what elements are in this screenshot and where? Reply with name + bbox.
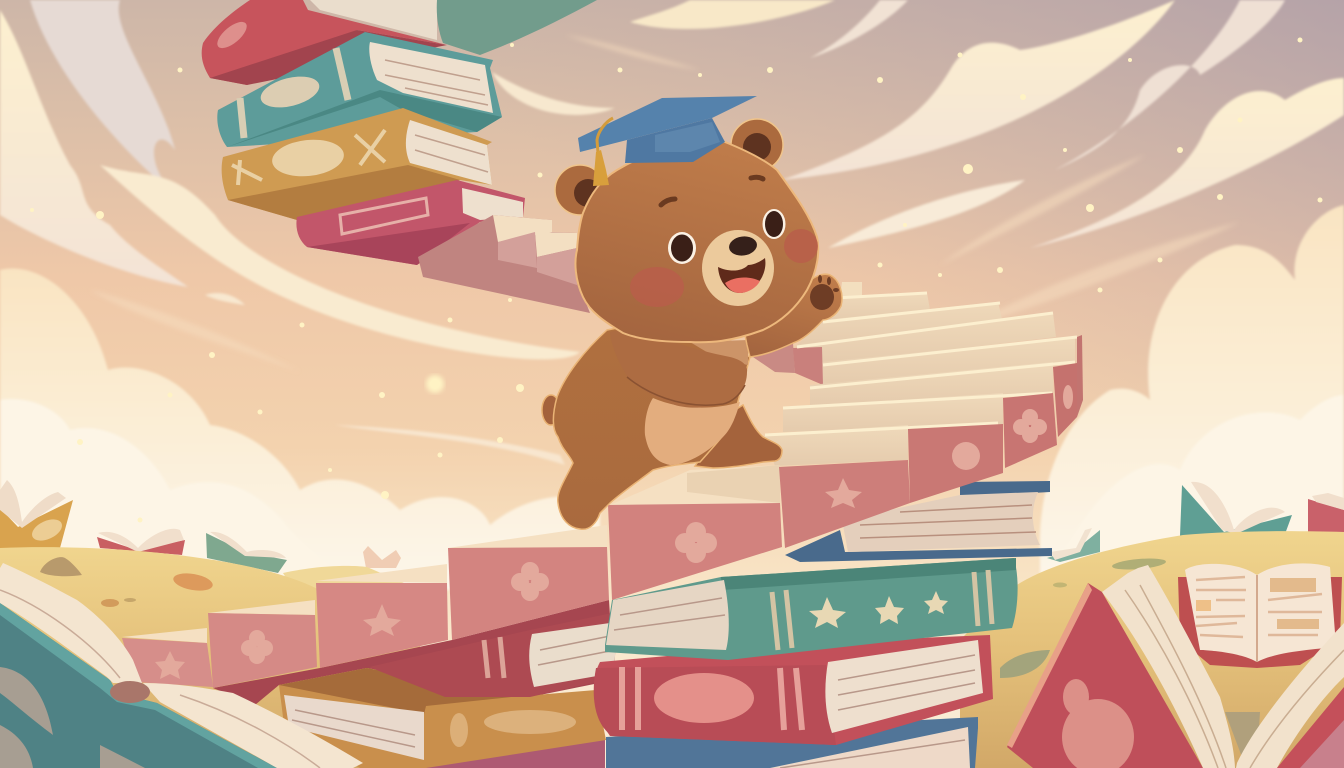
book stack under upper stairs xyxy=(594,481,1052,768)
book: yellow xyxy=(222,108,492,220)
distant open books on the horizon xyxy=(0,480,1344,573)
book: teal xyxy=(605,558,1018,660)
riser motifs xyxy=(155,385,1073,679)
riser 4 xyxy=(448,547,609,640)
book stack under lower stairs xyxy=(213,600,617,768)
large cloud bank left xyxy=(0,268,600,590)
bear body and left leg xyxy=(553,320,750,529)
upper left book stack xyxy=(202,0,597,313)
bear right ear xyxy=(731,119,783,171)
graduation cap xyxy=(578,96,757,186)
riser 9 xyxy=(1053,363,1077,437)
foreground left open book xyxy=(0,563,363,768)
bear tail xyxy=(542,395,560,425)
riser 1 xyxy=(122,638,213,687)
floating stairs xyxy=(418,215,590,313)
tread front 5 xyxy=(687,465,780,503)
book: left red xyxy=(369,612,617,697)
book: red xyxy=(594,635,993,745)
book: teal xyxy=(217,32,502,147)
left sand hill xyxy=(0,547,420,768)
bear belly xyxy=(645,398,740,465)
book: magenta bottom edge xyxy=(400,738,605,768)
book: top navy xyxy=(785,481,1052,562)
riser 5 xyxy=(608,503,782,600)
book: dark red shadow side under the stairs xyxy=(213,600,614,705)
foreground right open book xyxy=(1007,565,1344,768)
riser 2 xyxy=(208,613,317,688)
bear paw pads xyxy=(810,275,839,310)
tread tops xyxy=(122,465,780,643)
bear cheeks xyxy=(630,229,818,307)
bear xyxy=(542,96,842,529)
riser 8 xyxy=(1003,393,1057,468)
book: bottom blue xyxy=(606,717,978,768)
riser 6 xyxy=(779,460,910,548)
bear left ear xyxy=(555,165,605,215)
book: small red xyxy=(296,180,525,265)
bear arm shadow line xyxy=(627,377,745,405)
sparkles xyxy=(30,38,1322,522)
bear eyes xyxy=(668,209,786,264)
open book on right hill xyxy=(1178,563,1342,668)
bear nose xyxy=(728,235,758,257)
riser 3 xyxy=(316,583,448,668)
bear muzzle xyxy=(702,230,774,306)
bear crossing arm xyxy=(610,330,747,408)
bear chest patch xyxy=(690,340,748,365)
staircase upper cream treads xyxy=(750,282,1077,466)
book: top green xyxy=(437,0,597,55)
bear mouth xyxy=(718,258,765,293)
bear eyebrows xyxy=(661,177,763,205)
bear raised arm xyxy=(745,274,842,357)
riser 10 xyxy=(1077,335,1083,417)
book: top red xyxy=(202,0,447,85)
swirling cloud streaks in the upper sky xyxy=(0,0,1344,465)
riser 7 xyxy=(908,424,1003,503)
faint diagonal sky bands xyxy=(90,35,1240,372)
large cloud bank right xyxy=(1040,205,1344,590)
right sand hill xyxy=(960,531,1344,768)
staircase pink risers xyxy=(122,335,1083,688)
book: orange xyxy=(279,668,606,768)
bear head xyxy=(575,142,818,342)
bear right leg xyxy=(695,405,782,468)
